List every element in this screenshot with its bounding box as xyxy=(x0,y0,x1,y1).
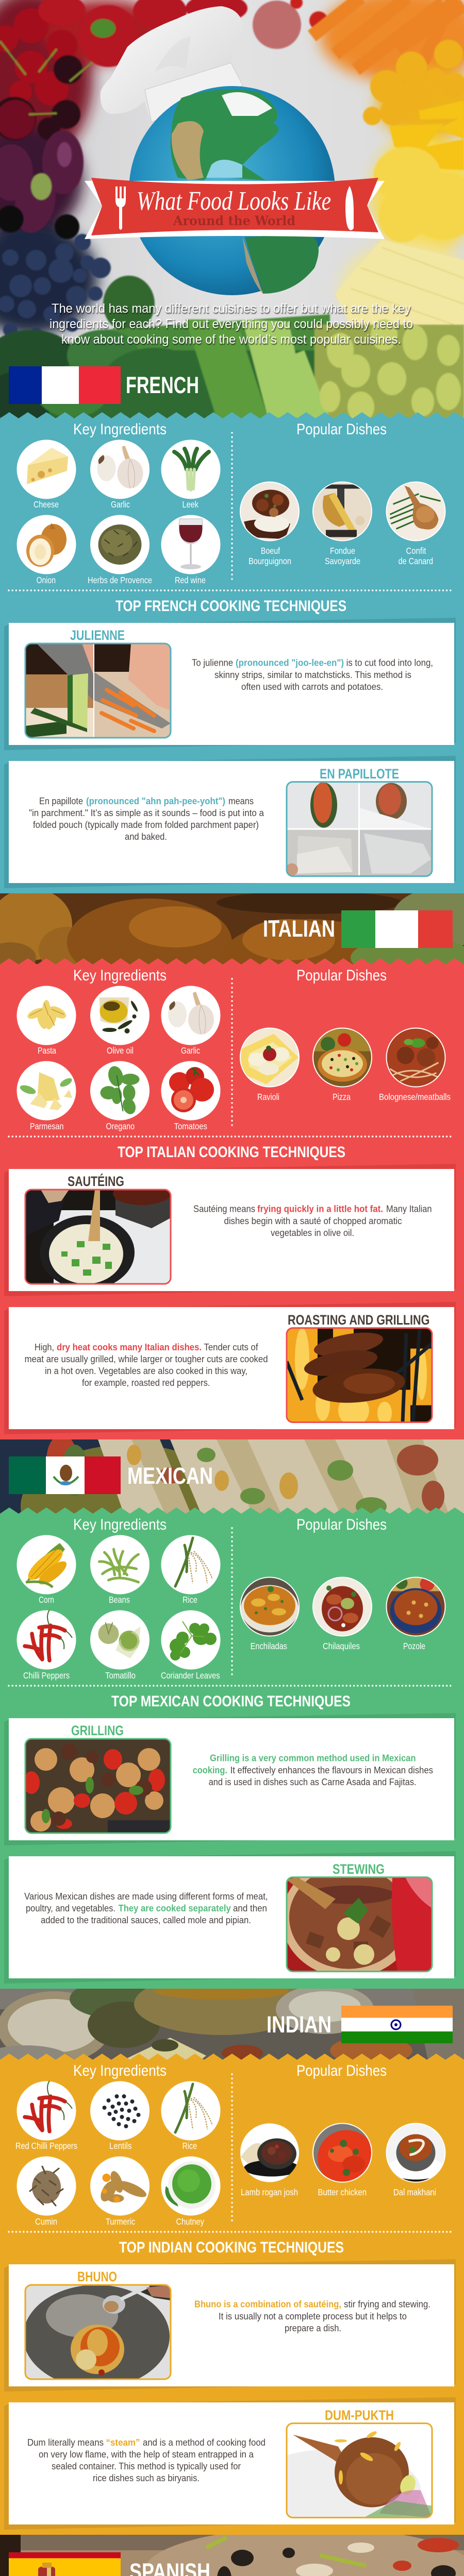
dish: dal makhani: Dal makhani xyxy=(393,2187,436,2197)
panel: Mexican cuisine xyxy=(0,1507,464,1989)
dish: pizza: Pizza xyxy=(333,1092,351,1102)
text: grilling description: It effectively enhances the flavours in Mexican dishes xyxy=(230,1765,433,1775)
dish: fondue savoyarde: Fondue xyxy=(330,546,355,556)
card: dum-pukth xyxy=(4,2397,456,2532)
card: roasting and grilling xyxy=(4,1302,456,1434)
heading: popular dishes: Popular Dishes xyxy=(296,1516,387,1533)
text: stewing description: added to the traditional sauces, called mole and pipian. xyxy=(41,1915,251,1925)
dish: boeuf bourguignon xyxy=(239,480,301,566)
flag: Italy xyxy=(341,910,453,948)
ingredient: pasta xyxy=(16,986,76,1056)
ingredient: cumin: Cumin xyxy=(35,2216,57,2227)
ingredient: chilli peppers xyxy=(16,1610,76,1681)
ingredient: red chilli peppers: Red Chilli Peppers xyxy=(15,2141,77,2151)
heading: popular dishes: Popular Dishes xyxy=(296,2062,387,2079)
panel: Indian cuisine xyxy=(0,2054,464,2535)
text: en papillote description xyxy=(29,796,264,842)
text: roasting description: dry heat cooks many Italian dishes. xyxy=(57,1342,202,1352)
hero: Italian roast chicken banner xyxy=(0,893,464,964)
heading: top Mexican cooking techniques: TOP MEXICAN COOKING TECHNIQUES xyxy=(111,1693,351,1710)
heading: French: FRENCH xyxy=(126,372,199,398)
text: julienne description: To julienne xyxy=(192,658,233,668)
text: grilling description xyxy=(193,1753,433,1787)
ingredient: garlic: Garlic xyxy=(181,1045,200,1056)
ingredient: chilli peppers: Chilli Peppers xyxy=(23,1670,70,1681)
photo: grilled kebabs xyxy=(23,1739,171,1833)
heading: top French cooking techniques: TOP FRENCH COOKING TECHNIQUES xyxy=(115,598,346,615)
text: stewing description: They are cooked separately xyxy=(119,1903,231,1913)
photo: grilled chicken drumsticks xyxy=(287,1328,432,1426)
text: sautéing description xyxy=(193,1204,432,1238)
heading: key ingredients: Key Ingredients xyxy=(73,1516,167,1533)
intro text: The world has many different cuisines to offer but what are the key xyxy=(52,301,411,316)
ingredient: corn xyxy=(16,1535,76,1605)
ingredient: oregano xyxy=(90,1061,150,1131)
dish: pizza xyxy=(311,1026,373,1102)
ingredient: pasta: Pasta xyxy=(38,1045,56,1056)
dish: bolognese meatballs xyxy=(379,1026,451,1102)
ingredient: garlic xyxy=(90,440,150,510)
text: stewing description: poultry, and vegetables. xyxy=(26,1903,115,1913)
ingredient: herbs de Provence xyxy=(88,515,152,585)
hero: Indian thali bowls banner xyxy=(0,1989,464,2060)
card: sautéing xyxy=(4,1164,456,1296)
dish: lamb rogan josh: Lamb rogan josh xyxy=(241,2187,298,2197)
dish: butter chicken xyxy=(312,2123,372,2195)
ingredient: rice xyxy=(161,2081,221,2151)
subtitle: Around the World xyxy=(173,213,295,228)
text: dum-pukth description: and is a method of cooking food xyxy=(143,2437,266,2448)
flag: India xyxy=(341,2006,453,2043)
photo: julienne cutting xyxy=(25,643,171,738)
ingredient: garlic xyxy=(161,986,221,1056)
ingredient: parmesan: Parmesan xyxy=(30,1121,64,1131)
text: julienne description xyxy=(192,658,433,692)
text: roasting description: High, xyxy=(35,1342,54,1352)
text: stewing description xyxy=(24,1891,268,1925)
title script text: What Food Looks Like xyxy=(137,187,331,216)
ingredient: beans xyxy=(90,1535,150,1605)
text: dum-pukth description xyxy=(27,2437,266,2483)
heading: top Italian cooking techniques: TOP ITALIAN COOKING TECHNIQUES xyxy=(118,1144,345,1161)
hero: title background with coloured fruit and vegetables xyxy=(0,0,464,422)
ingredient: lentils: Lentils xyxy=(109,2141,132,2151)
ingredient: lentils xyxy=(90,2081,150,2151)
text: stewing description: Various Mexican dishes are made using different forms of meat, xyxy=(24,1891,268,1902)
text: bhuno description: prepare a dish. xyxy=(285,2323,341,2333)
photo: sautéing onions and peppers xyxy=(25,1182,171,1290)
text: bhuno description: stir frying and stewing. xyxy=(344,2299,430,2310)
dish: chilaquiles xyxy=(311,1575,373,1651)
dish: fondue savoyarde xyxy=(311,480,373,566)
icon: fork xyxy=(115,187,126,230)
text: roasting description: for example, roasted red peppers. xyxy=(82,1378,210,1388)
text: grilling description: Grilling is a very common method used in Mexican xyxy=(210,1753,416,1764)
text: dum-pukth description: rice dishes such as biryanis. xyxy=(93,2473,200,2483)
ingredient: tomatillo: Tomatillo xyxy=(105,1670,136,1681)
text: dum-pukth description: on very low flame, with the help of steam entrapped in a xyxy=(39,2449,254,2460)
ingredient: tomatoes xyxy=(161,1061,221,1131)
card: bhuno xyxy=(4,2259,456,2392)
text: julienne description: (pronounced "joo-lee-en") xyxy=(236,658,344,668)
flag: France xyxy=(9,366,121,404)
text: sautéing description: Many Italian xyxy=(386,1204,432,1214)
text: dum-pukth description: sealed container. This method is typically used for xyxy=(52,2461,241,2471)
icon: knife xyxy=(345,186,354,230)
text: bhuno description xyxy=(194,2299,430,2333)
card: stewing xyxy=(4,1851,456,1984)
ingredient: beans: Beans xyxy=(109,1595,130,1605)
text: en papillote description: "in parchment." It’s as simple as it sounds – food is put into a xyxy=(29,808,264,818)
text: en papillote description: means xyxy=(228,796,254,806)
dish: dal makhani xyxy=(385,2122,446,2197)
ingredient: turmeric xyxy=(90,2157,150,2227)
text: grilling description: and is used in dishes such as Carne Asada and Fajitas. xyxy=(209,1777,417,1787)
text: dum-pukth description: “steam” xyxy=(106,2437,140,2448)
text: roasting description xyxy=(25,1342,268,1388)
dish: boeuf bourguignon: Boeuf xyxy=(261,546,280,556)
heading: julienne: JULIENNE xyxy=(70,628,125,643)
dish: enchiladas xyxy=(239,1575,301,1651)
ingredient: chutney xyxy=(161,2157,221,2227)
card: grilling xyxy=(4,1713,456,1845)
dish: pozole xyxy=(385,1575,446,1651)
heading: key ingredients: Key Ingredients xyxy=(73,967,167,984)
text: roasting description: in a hot oven. Vegetables are also cooked in this way, xyxy=(45,1366,247,1376)
intro text: know about cooking some of the world’s most popular cuisines. xyxy=(61,332,401,347)
flag: Spain xyxy=(9,2552,121,2576)
heading: grilling: GRILLING xyxy=(71,1723,124,1738)
ingredient: rice: Rice xyxy=(183,1595,197,1605)
ingredient: corn: Corn xyxy=(39,1595,54,1605)
panel: Italian cuisine xyxy=(0,958,464,1439)
text: bhuno description: It is usually not a complete process but it helps to xyxy=(219,2311,407,2321)
dish: fondue savoyarde: Savoyarde xyxy=(325,556,360,566)
text: sautéing description: frying quickly in a little hot fat. xyxy=(257,1204,383,1214)
ingredient: leek xyxy=(161,440,221,510)
dish: lamb rogan josh xyxy=(240,2124,300,2197)
ingredient: oregano: Oregano xyxy=(106,1121,135,1131)
text: en papillote description: folded pouch (typically made from folded parchment paper) xyxy=(33,820,259,830)
title banner xyxy=(85,178,385,239)
text: en papillote description: En papillote xyxy=(39,796,83,806)
text: sautéing description: dishes begin with a sauté of chopped aromatic xyxy=(224,1216,402,1226)
text: julienne description: is to cut food into long, xyxy=(346,658,433,668)
heading: key ingredients: Key Ingredients xyxy=(73,421,167,438)
ingredient: tomatoes: Tomatoes xyxy=(174,1121,207,1131)
dish: confit de canard: Confit xyxy=(406,546,426,556)
heading: popular dishes: Popular Dishes xyxy=(296,421,387,438)
text: sautéing description: Sautéing means xyxy=(193,1204,255,1214)
text: sautéing description: vegetables in olive oil. xyxy=(271,1228,354,1238)
dish: chilaquiles: Chilaquiles xyxy=(323,1641,360,1651)
dish: confit de canard xyxy=(385,480,446,566)
dish: enchiladas: Enchiladas xyxy=(251,1641,287,1651)
heading: roasting and grilling: ROASTING AND GRILLING xyxy=(288,1312,430,1328)
ingredient: leek: Leek xyxy=(183,499,198,510)
icon: globe with the Americas xyxy=(129,86,335,295)
photo: bhuno pan xyxy=(23,2285,171,2388)
intro text: ingredients for each? Find out everything you could possibly need to xyxy=(49,317,413,331)
dish: butter chicken: Butter chicken xyxy=(318,2187,367,2197)
dish: pozole: Pozole xyxy=(403,1641,425,1651)
heading: bhuno: BHUNO xyxy=(77,2269,117,2284)
ingredient: turmeric: Turmeric xyxy=(106,2216,135,2227)
ingredient: onion: Onion xyxy=(37,575,56,585)
heading: popular dishes: Popular Dishes xyxy=(296,967,387,984)
ingredient: cheese xyxy=(16,440,76,510)
ingredient: tomatillo xyxy=(90,1611,150,1681)
heading: key ingredients: Key Ingredients xyxy=(73,2062,167,2079)
ingredient: herbs de Provence: Herbs de Provence xyxy=(88,575,152,585)
ingredient: red chilli peppers xyxy=(15,2081,77,2151)
text: julienne description: often used with carrots and potatoes. xyxy=(241,682,383,692)
photo: dum-pukth drumstick xyxy=(286,2422,433,2518)
ingredient: olive oil: Olive oil xyxy=(107,1045,134,1056)
ingredient: coriander leaves: Coriander Leaves xyxy=(161,1670,220,1681)
ingredient: garlic: Garlic xyxy=(111,499,130,510)
card: julienne xyxy=(4,618,456,750)
ingredient: rice xyxy=(161,1535,221,1605)
icon: chef hat xyxy=(101,6,243,122)
ingredient: red wine xyxy=(161,515,221,585)
card: en papillote xyxy=(4,756,456,888)
ingredient: red wine: Red wine xyxy=(175,575,206,585)
text: en papillote description: (pronounced "ahn pah-pee-yoht") xyxy=(86,796,225,806)
text: roasting description: Tender cuts of xyxy=(204,1342,258,1352)
text: bhuno description: Bhuno is a combination of sautéing, xyxy=(194,2299,341,2310)
dish: ravioli: Ravioli xyxy=(257,1092,279,1102)
text: grilling description: cooking. xyxy=(193,1765,227,1775)
ingredient: olive oil xyxy=(90,986,150,1056)
text: dum-pukth description: Dum literally means xyxy=(27,2437,104,2448)
ingredient: rice: Rice xyxy=(183,2141,197,2151)
ingredient: cumin xyxy=(16,2157,76,2227)
dish: ravioli xyxy=(239,1026,301,1102)
ingredient: chutney: Chutney xyxy=(176,2216,204,2227)
panel: French cuisine xyxy=(0,412,464,893)
ingredient: parmesan xyxy=(16,1061,76,1131)
heading: stewing: STEWING xyxy=(333,1861,385,1877)
text: julienne description: skinny strips, similar to matchsticks. This method is xyxy=(214,670,411,680)
dish: boeuf bourguignon: Bourguignon xyxy=(248,556,291,566)
photo: en papillote parcels xyxy=(286,782,432,876)
dish: confit de canard: de Canard xyxy=(399,556,433,566)
heading: Indian: INDIAN xyxy=(267,2011,332,2038)
text: en papillote description: and baked. xyxy=(125,832,167,842)
flag: Mexico xyxy=(9,1456,121,1494)
heading: Italian: ITALIAN xyxy=(263,916,335,942)
heading: dum-pukth: DUM-PUKTH xyxy=(325,2408,394,2423)
heading: Mexican: MEXICAN xyxy=(127,1463,213,1489)
intro text xyxy=(49,301,413,347)
text: stewing description: and then xyxy=(233,1903,267,1913)
dish: bolognese meatballs: Bolognese/meatballs xyxy=(379,1092,451,1102)
photo: stew pot xyxy=(286,1876,433,1972)
hero: Mexican tacos banner xyxy=(0,1439,464,1514)
heading: en papillote: EN PAPILLOTE xyxy=(320,766,399,782)
ingredient: cheese: Cheese xyxy=(34,499,59,510)
text: roasting description: meat are usually grilled, while larger or tougher cuts are cooked xyxy=(25,1354,268,1364)
heading: top Indian cooking techniques: TOP INDIAN COOKING TECHNIQUES xyxy=(119,2239,344,2256)
heading: sautéing: SAUTÉING xyxy=(68,1174,124,1189)
hero: Spanish pizza banner xyxy=(0,2535,464,2576)
ingredient: onion xyxy=(16,515,76,585)
ingredient: coriander leaves xyxy=(161,1611,221,1681)
